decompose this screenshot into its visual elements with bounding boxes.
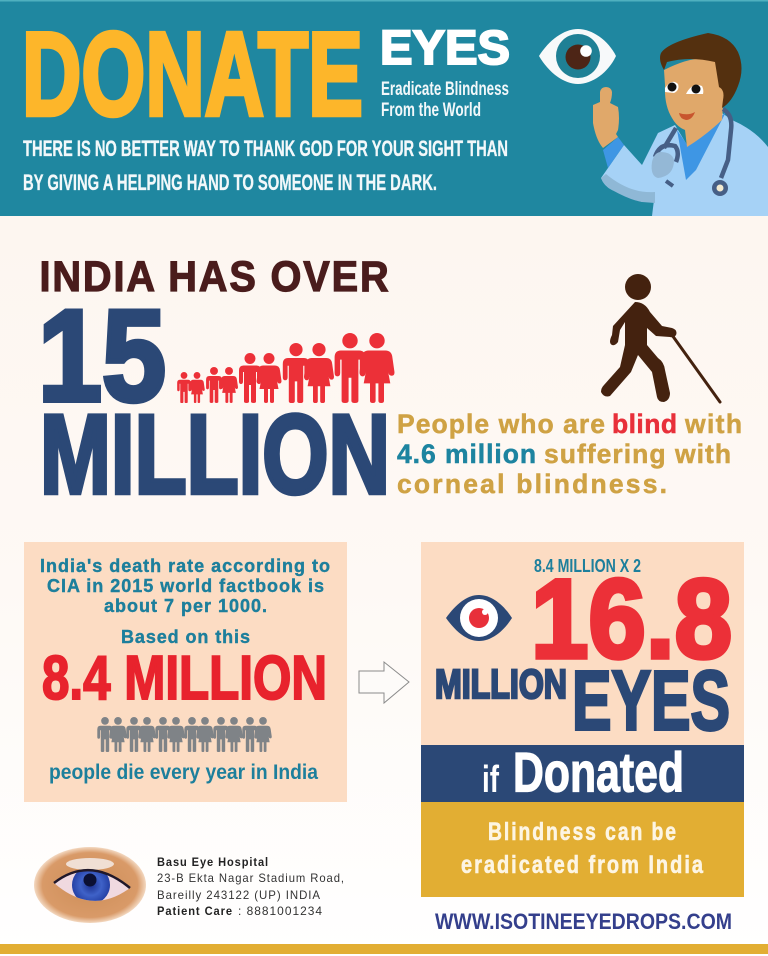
header message bbox=[23, 136, 508, 195]
icon: blind person with cane bbox=[601, 274, 720, 402]
band: blindness can be eradicated: eradicated from India bbox=[461, 851, 705, 879]
title: DONATE: DONATE bbox=[22, 8, 363, 141]
description text: suffering with bbox=[544, 439, 731, 469]
icon: eye photo bbox=[34, 847, 146, 923]
stethoscope bbox=[655, 109, 731, 178]
icon: grey people row bbox=[97, 717, 272, 752]
header message: BY GIVING A HELPING HAND TO SOMEONE IN THE DARK. bbox=[23, 170, 437, 195]
hospital address: 23-B Ekta Nagar Stadium Road, bbox=[157, 871, 345, 885]
tagline: Eradicate Blindness bbox=[381, 79, 509, 100]
hospital address: Patient Care bbox=[157, 904, 233, 918]
caption: people die every year in India bbox=[49, 761, 318, 784]
hospital address: Basu Eye Hospital bbox=[157, 855, 269, 869]
header banner bbox=[0, 0, 768, 216]
hospital address: : 8881001234 bbox=[238, 904, 323, 918]
face bbox=[664, 58, 731, 147]
death rate text bbox=[40, 556, 330, 647]
band: if donated bbox=[421, 740, 744, 804]
description text: People who are bbox=[397, 409, 605, 439]
hospital address bbox=[157, 855, 345, 918]
arrow bbox=[359, 662, 409, 703]
panel: 16.8 million eyes bbox=[421, 542, 744, 748]
band: if donated: if bbox=[482, 759, 499, 801]
header message: THERE IS NO BETTER WAY TO THANK GOD FOR YOUR SIGHT THAN bbox=[23, 136, 508, 161]
death rate text: Based on this bbox=[121, 627, 250, 647]
footer bar bbox=[0, 944, 768, 954]
big number: 8.4 million: 8.4 MILLION bbox=[42, 644, 327, 713]
hand bbox=[593, 87, 619, 148]
description text: blind bbox=[612, 409, 677, 439]
website: WWW.ISOTINEEYEDROPS.COM bbox=[435, 909, 732, 934]
description text: corneal blindness. bbox=[397, 469, 667, 499]
icon: doctor bbox=[593, 33, 768, 216]
tagline: From the World bbox=[381, 100, 481, 121]
death rate text: India's death rate according to bbox=[40, 556, 330, 576]
tagline bbox=[381, 79, 509, 121]
description text: with bbox=[684, 409, 742, 439]
big number: 15: 15 bbox=[38, 282, 166, 428]
big word: MILLION: MILLION bbox=[40, 392, 390, 517]
band: blindness can be eradicated bbox=[421, 802, 744, 897]
shirt bbox=[677, 112, 726, 180]
icon: red family figures bbox=[177, 333, 394, 403]
calculation: 8.4 MILLION X 2 bbox=[534, 555, 641, 576]
heading: India has over: INDIA HAS OVER bbox=[40, 253, 390, 301]
title: EYES: EYES bbox=[380, 22, 510, 75]
eyes bbox=[665, 82, 678, 93]
death rate text: CIA in 2015 world factbook is bbox=[47, 576, 324, 596]
panel: death rate bbox=[24, 542, 347, 802]
description text bbox=[397, 409, 742, 499]
big number: 16.8: 16.8 bbox=[531, 556, 732, 682]
hair bbox=[660, 33, 742, 108]
icon: navy eye bbox=[446, 595, 512, 641]
band: if donated: Donated bbox=[513, 740, 684, 804]
hospital address: Bareilly 243122 (UP) INDIA bbox=[157, 888, 321, 902]
coat bbox=[601, 113, 768, 216]
death rate text: about 7 per 1000. bbox=[104, 596, 267, 616]
band: blindness can be eradicated: Blindness can be bbox=[488, 818, 678, 846]
word: MILLION: MILLION bbox=[435, 661, 567, 707]
description text: 4.6 million bbox=[397, 439, 536, 469]
page background bbox=[0, 216, 768, 956]
icon: eye bbox=[539, 29, 616, 84]
mouth bbox=[679, 112, 695, 120]
